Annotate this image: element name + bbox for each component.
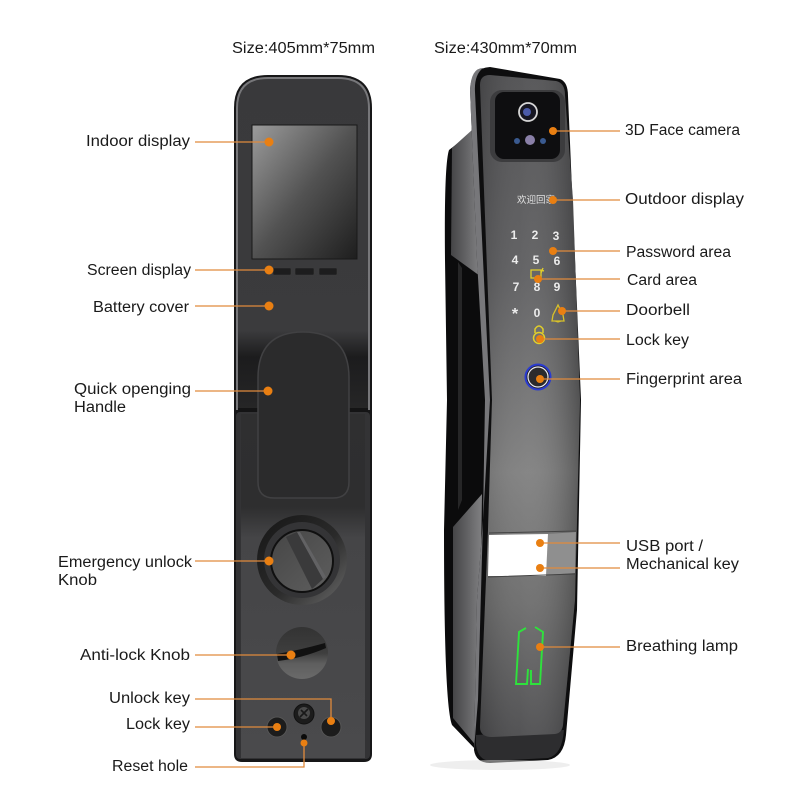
callouts: right side — [534, 122, 744, 655]
front body — [470, 67, 581, 763]
label: breathing lamp: Breathing lamp — [626, 638, 738, 655]
keypad: 0 — [534, 306, 541, 320]
screen buttons — [273, 268, 337, 275]
label: indoor display: Indoor display — [86, 133, 190, 150]
label: card area: Card area — [627, 272, 697, 289]
keypad: 4 — [512, 253, 519, 267]
label: reset hole — [112, 740, 308, 775]
label: outdoor display: Outdoor display — [625, 191, 744, 208]
quick opening handle — [258, 332, 349, 498]
indoor screen — [252, 125, 357, 259]
label: lock key — [536, 332, 689, 349]
label: USB port — [536, 538, 704, 555]
reset hole — [301, 734, 307, 740]
front plate — [480, 75, 580, 737]
keypad: 3 — [553, 229, 560, 243]
camera lens — [519, 103, 537, 121]
label: mechanical key: Mechanical key — [626, 556, 739, 573]
outdoor display text: 欢迎回家 — [517, 194, 556, 206]
label: unlock key — [109, 690, 335, 725]
label: doorbell — [558, 302, 690, 319]
keypad: 9 — [554, 280, 561, 294]
lock key button — [267, 717, 287, 737]
label: anti-lock knob — [80, 647, 296, 664]
label: fingerprint area: Fingerprint area — [626, 371, 742, 388]
indoor lock body — [234, 75, 372, 762]
breathing lamp — [516, 627, 543, 684]
bell icon — [552, 305, 564, 322]
keypad: 8 — [534, 280, 541, 294]
size label: indoor unit: Size:405mm*75mm — [232, 40, 375, 57]
label: emergency unlock knob: Emergency unlock — [58, 554, 192, 571]
label: screen display — [87, 262, 274, 279]
card icon — [531, 268, 544, 278]
label: anti-lock knob: Anti-lock Knob — [80, 647, 190, 664]
label: doorbell: Doorbell — [626, 302, 690, 319]
label: lock key: Lock key — [626, 332, 689, 349]
rear handle — [444, 140, 490, 750]
screw — [294, 704, 314, 724]
label: USB port: USB port / — [626, 538, 704, 555]
keypad: 1 — [511, 228, 518, 242]
anti-lock knob — [276, 627, 328, 679]
floor shadow — [430, 760, 570, 770]
label: unlock key: Unlock key — [109, 690, 190, 707]
base of front body — [476, 730, 564, 761]
label: battery cover: Battery cover — [93, 299, 189, 316]
keypad: * — [512, 306, 519, 323]
callouts: left side — [58, 133, 335, 775]
label: quick opening handle: Quick openging — [74, 381, 191, 398]
label: screen display: Screen display — [87, 262, 191, 279]
label: emergency unlock knob — [58, 554, 274, 589]
camera panel — [490, 90, 565, 162]
label: battery cover — [93, 299, 274, 316]
keypad: 7 — [513, 280, 520, 294]
infrared sensors — [525, 135, 535, 145]
label: quick opening handle: Handle — [74, 399, 126, 416]
label: lock key: Lock key — [126, 716, 190, 733]
label: quick opening handle — [74, 381, 272, 416]
keypad — [511, 228, 561, 323]
label: indoor display — [86, 133, 274, 150]
keypad: 5 — [533, 253, 540, 267]
label: breathing lamp — [536, 638, 738, 655]
label: mechanical key — [536, 556, 739, 573]
label: password area — [549, 244, 731, 261]
label: 3D face camera — [549, 122, 740, 139]
label: fingerprint area — [536, 371, 742, 388]
label: 3D face camera: 3D Face camera — [625, 122, 740, 139]
fingerprint sensor — [526, 364, 550, 390]
lock icon — [534, 326, 544, 344]
label: lock key — [126, 716, 281, 733]
emergency unlock knob — [257, 515, 347, 605]
label: card area — [534, 272, 697, 289]
outdoor lock body — [444, 67, 581, 763]
label: password area: Password area — [626, 244, 731, 261]
size label: outdoor unit: Size:430mm*70mm — [434, 40, 577, 57]
label: outdoor display — [549, 191, 744, 208]
keypad: 6 — [554, 254, 561, 268]
label: reset hole: Reset hole — [112, 758, 188, 775]
USB / mechanical key panel — [488, 531, 576, 577]
label: emergency unlock knob: Knob — [58, 572, 97, 589]
unlock key button — [321, 717, 341, 737]
keypad: 2 — [532, 228, 539, 242]
